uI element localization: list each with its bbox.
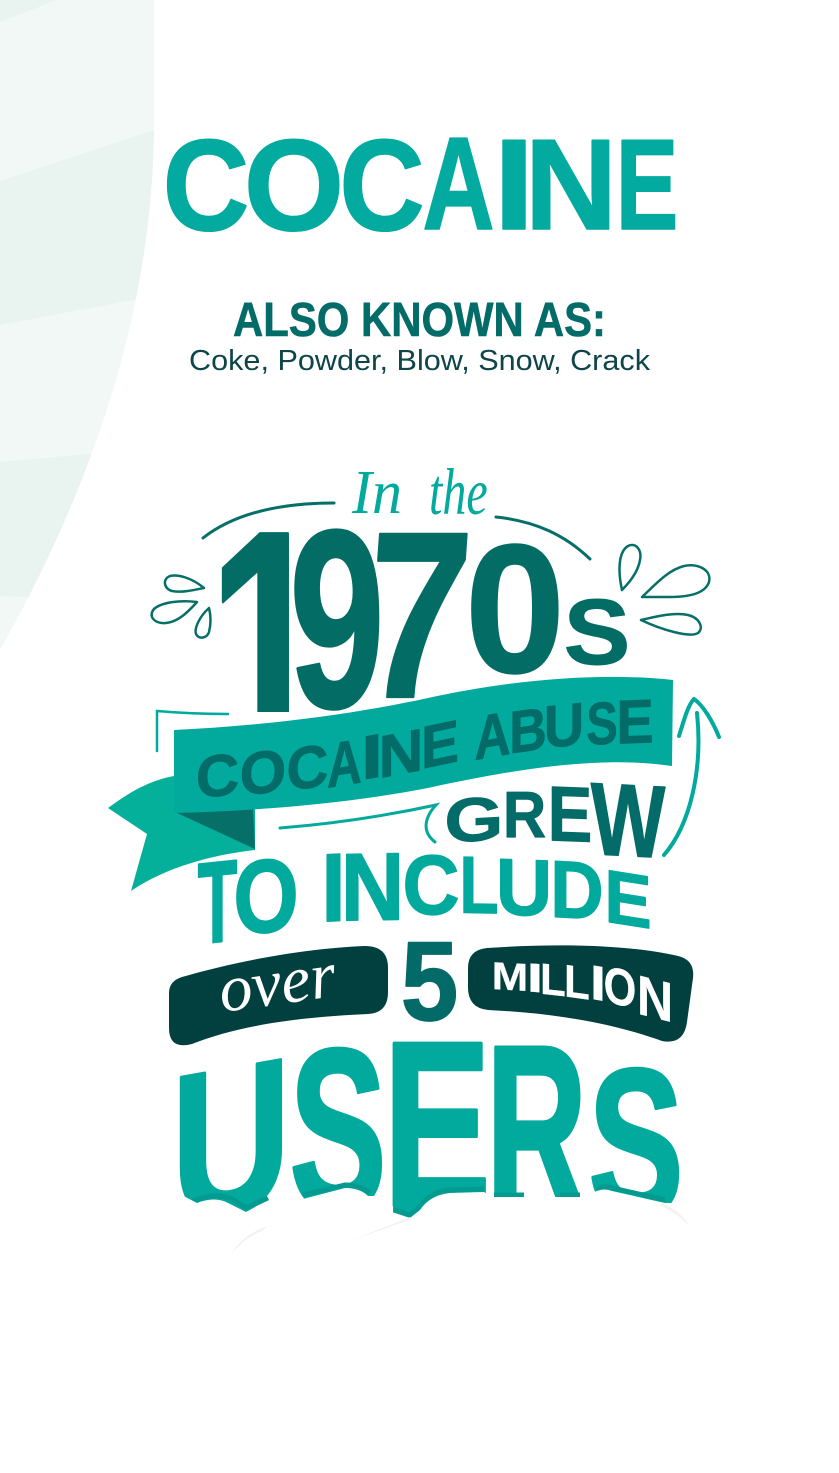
title: COCAINE: I [493,112,535,257]
word: users [171,992,692,1269]
big number: 1970s: 0 [465,508,565,711]
background: curved striped panel [0,0,160,660]
pill: million: N [637,964,673,1035]
pill: million: L [540,955,566,1007]
subtitle: also known as [189,294,651,377]
ribbon text: O [240,735,286,809]
ribbon text: I [361,721,383,794]
script: In the: In [351,458,402,527]
headline lockup [108,457,719,1269]
ribbon text: B [509,694,547,766]
script: In the: the [429,457,488,529]
word: users: S [289,1001,387,1258]
big number: 1970s: 9 [289,477,385,761]
word: users: S [588,1026,684,1261]
pill: million: O [604,956,636,1020]
title: COCAINE: E [616,112,678,256]
ribbon text: S [586,690,618,758]
pill: over: over [214,938,341,1027]
ribbon text: U [544,690,584,762]
ribbon text: E [616,687,654,757]
word: GREW: W [591,762,666,880]
words: to include: I [321,832,346,943]
big number: 1970s: S [564,581,630,684]
ribbon banner: cocaine abuse [108,677,673,891]
pill: million: I [590,954,606,1012]
ribbon text: A [327,725,362,801]
pill: over [169,938,388,1045]
splash drops left [152,576,210,638]
ribbon text: A [474,699,511,774]
stem foot of the E [393,1195,422,1220]
title: COCAINE [163,110,678,258]
bracket line [157,711,228,751]
pill: million [468,945,693,1042]
ribbon text: E [421,706,459,782]
words: to include: E [604,854,652,945]
words: to include: U [496,841,552,933]
wave cut-out [172,1188,692,1262]
word: users: R [486,996,587,1262]
script: In the [351,457,488,529]
title: COCAINE: A [422,110,495,257]
number: 5: 5 [401,919,458,1044]
word: users: E [383,992,491,1255]
pointer line to GREW [280,805,436,842]
flourish curves above 1970s [203,503,590,559]
word: GREW: E [548,771,592,859]
pill: million: M [492,953,528,999]
ribbon fold [175,809,255,849]
heading: also known as: ALSO KNOWN AS: [233,294,606,347]
words: to include: T [198,835,237,969]
big number: 1970s [222,528,627,712]
word: users: U [171,1014,291,1269]
words: to include: O [233,837,299,957]
words: to include [198,832,652,969]
ribbon text [196,687,654,811]
word: GREW: G [444,783,504,856]
ribbon tail [108,776,255,891]
title: COCAINE: C [339,114,425,258]
title: COCAINE: C [163,113,249,258]
title: COCAINE: N [525,114,617,257]
big number: 1970s: 7 [357,483,478,748]
splash drops right [620,545,709,635]
pill: million: I [527,954,543,1001]
faint snow shadows [231,1203,689,1254]
words: to include: D [550,845,604,937]
ribbon body [174,677,673,813]
words: to include: L [459,841,499,931]
arrow up [664,699,719,855]
big number: 1970s: 1 [208,467,328,813]
street names: Coke, Powder, Blow, Snow, Crack [189,345,651,377]
ribbon text: C [287,730,328,804]
title: COCAINE: O [244,114,344,258]
word: GREW: R [503,778,546,852]
wave shading on letters [193,1185,665,1215]
ribbon text: C [196,740,239,811]
words: to include: C [402,839,460,933]
words: to include: N [341,833,404,941]
pill: million: L [564,956,590,1010]
word: GREW [444,762,666,880]
ribbon text: N [379,716,423,792]
